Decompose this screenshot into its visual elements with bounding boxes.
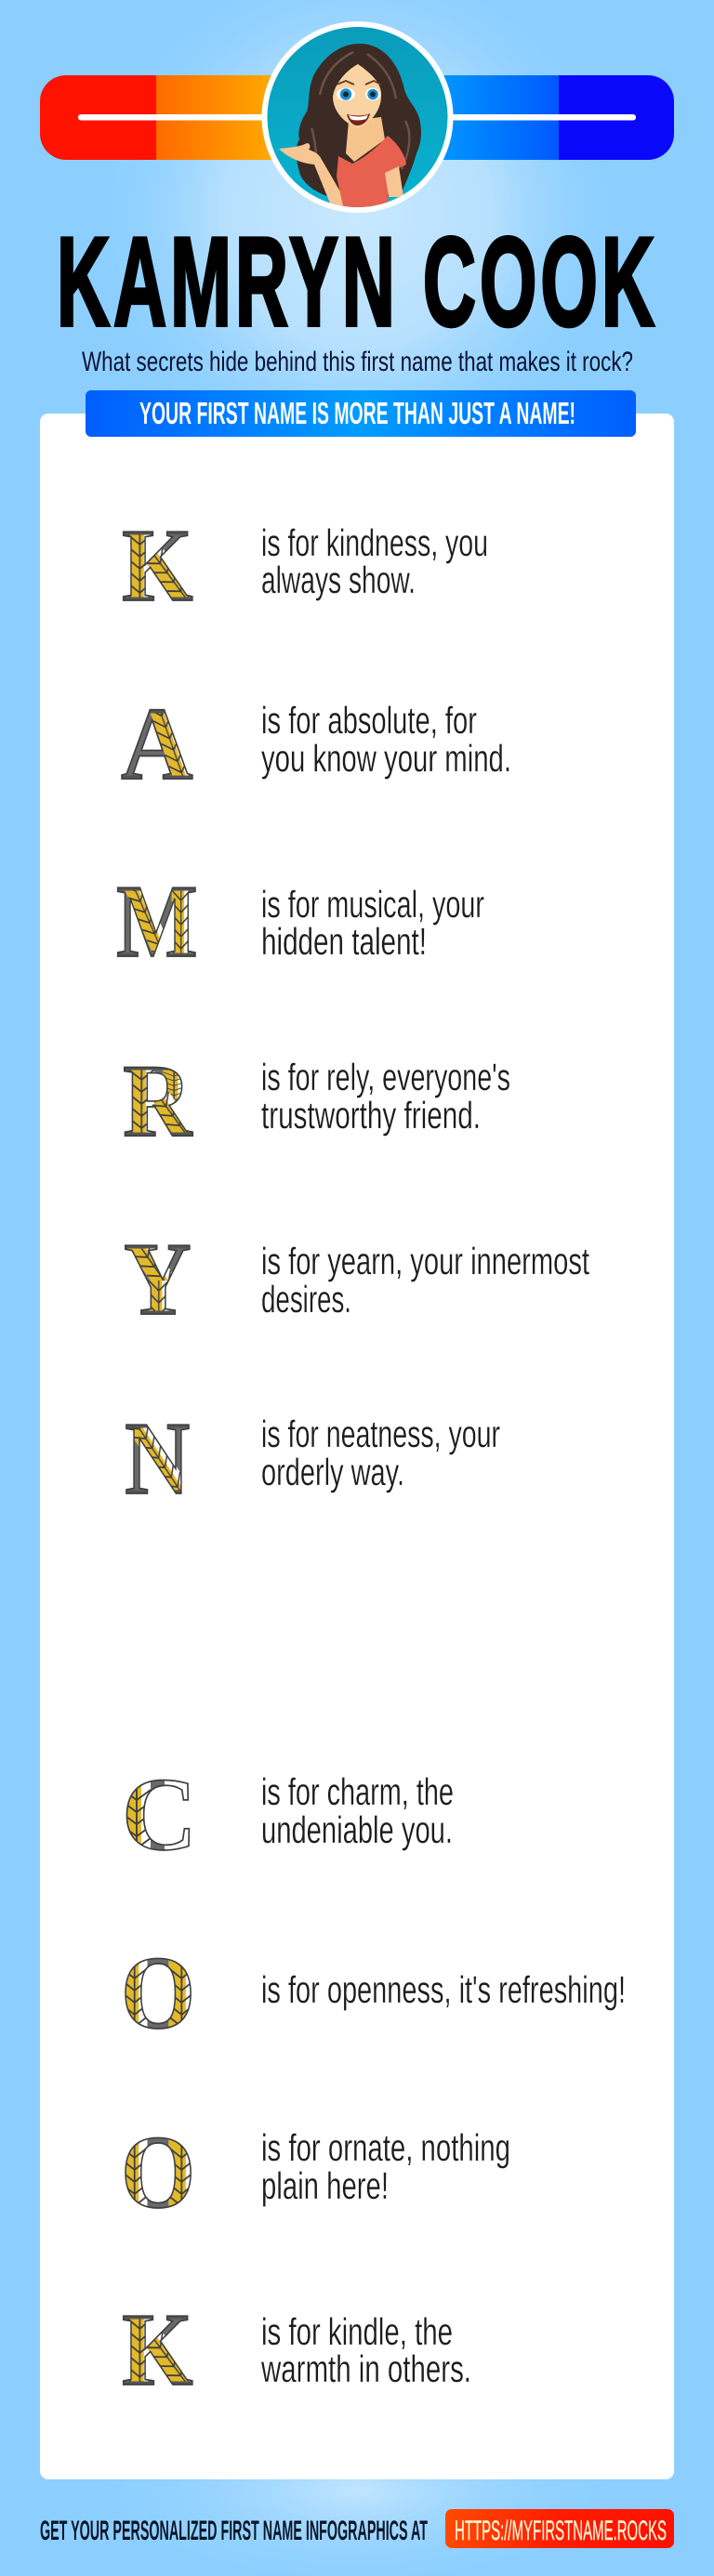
letter A: absolute — [121, 686, 511, 801]
letter K: kindness — [122, 507, 488, 623]
decorated letter M: M — [116, 864, 198, 979]
neatness text: is for neatness, your — [261, 1413, 500, 1455]
musical text: is for musical, your — [261, 883, 484, 926]
letter C: charm — [122, 1757, 454, 1873]
decorated letter A: A — [121, 686, 193, 801]
coral shirt — [337, 136, 406, 210]
white content panel — [40, 414, 674, 2479]
letter R: rely: trustworthy friend. — [261, 1094, 481, 1137]
decorated letter C: C — [122, 1757, 197, 1873]
far arm — [385, 166, 403, 197]
letter R: rely — [123, 1044, 510, 1159]
decorated letter Y: Y — [124, 1222, 192, 1337]
letter K: kindle: warmth in others. — [260, 2347, 471, 2390]
decorated letter K: K — [122, 2292, 193, 2407]
absolute text: is for absolute, for — [261, 699, 477, 742]
letter K: kindness: always show. — [261, 559, 416, 601]
decorated letter O: O — [121, 2115, 195, 2230]
charm text: is for charm, the — [261, 1770, 454, 1813]
header colour bar — [40, 75, 674, 160]
letter Y: yearn: desires. — [261, 1278, 351, 1321]
eyes — [337, 81, 381, 100]
ornate text: is for ornate, nothing — [261, 2126, 510, 2169]
letter C: charm: undeniable you. — [261, 1808, 453, 1851]
letter M: musical: hidden talent! — [261, 920, 427, 963]
letter M: musical — [116, 864, 484, 979]
decorated letter N: N — [125, 1400, 190, 1517]
hair highlights — [311, 52, 409, 169]
footer url button — [445, 2509, 674, 2548]
smile — [347, 113, 370, 125]
decorated letter O: O — [121, 1936, 195, 2051]
decorated letter R: R — [123, 1044, 193, 1159]
face — [333, 64, 381, 128]
rely text: is for rely, everyone's — [261, 1056, 510, 1098]
letter K: kindle — [122, 2292, 471, 2407]
arm and hand — [279, 143, 344, 206]
decorated letter K: K — [122, 507, 193, 623]
letter N: neatness: orderly way. — [261, 1451, 404, 1493]
kindle text: is for kindle, the — [261, 2310, 453, 2353]
letter A: absolute: you know your mind. — [261, 737, 511, 780]
banner — [86, 390, 636, 437]
yearn text: is for yearn, your innermost — [261, 1240, 589, 1282]
letter O: openness — [121, 1936, 626, 2051]
portrait medallion — [262, 21, 454, 213]
letter O: ornate: plain here! — [261, 2164, 389, 2207]
letter N: neatness — [125, 1400, 500, 1517]
letter O: ornate — [121, 2115, 510, 2230]
kindness text: is for kindness, you — [261, 521, 488, 564]
neck and chest — [346, 117, 385, 162]
letter Y: yearn — [124, 1222, 589, 1337]
hair — [297, 44, 421, 197]
